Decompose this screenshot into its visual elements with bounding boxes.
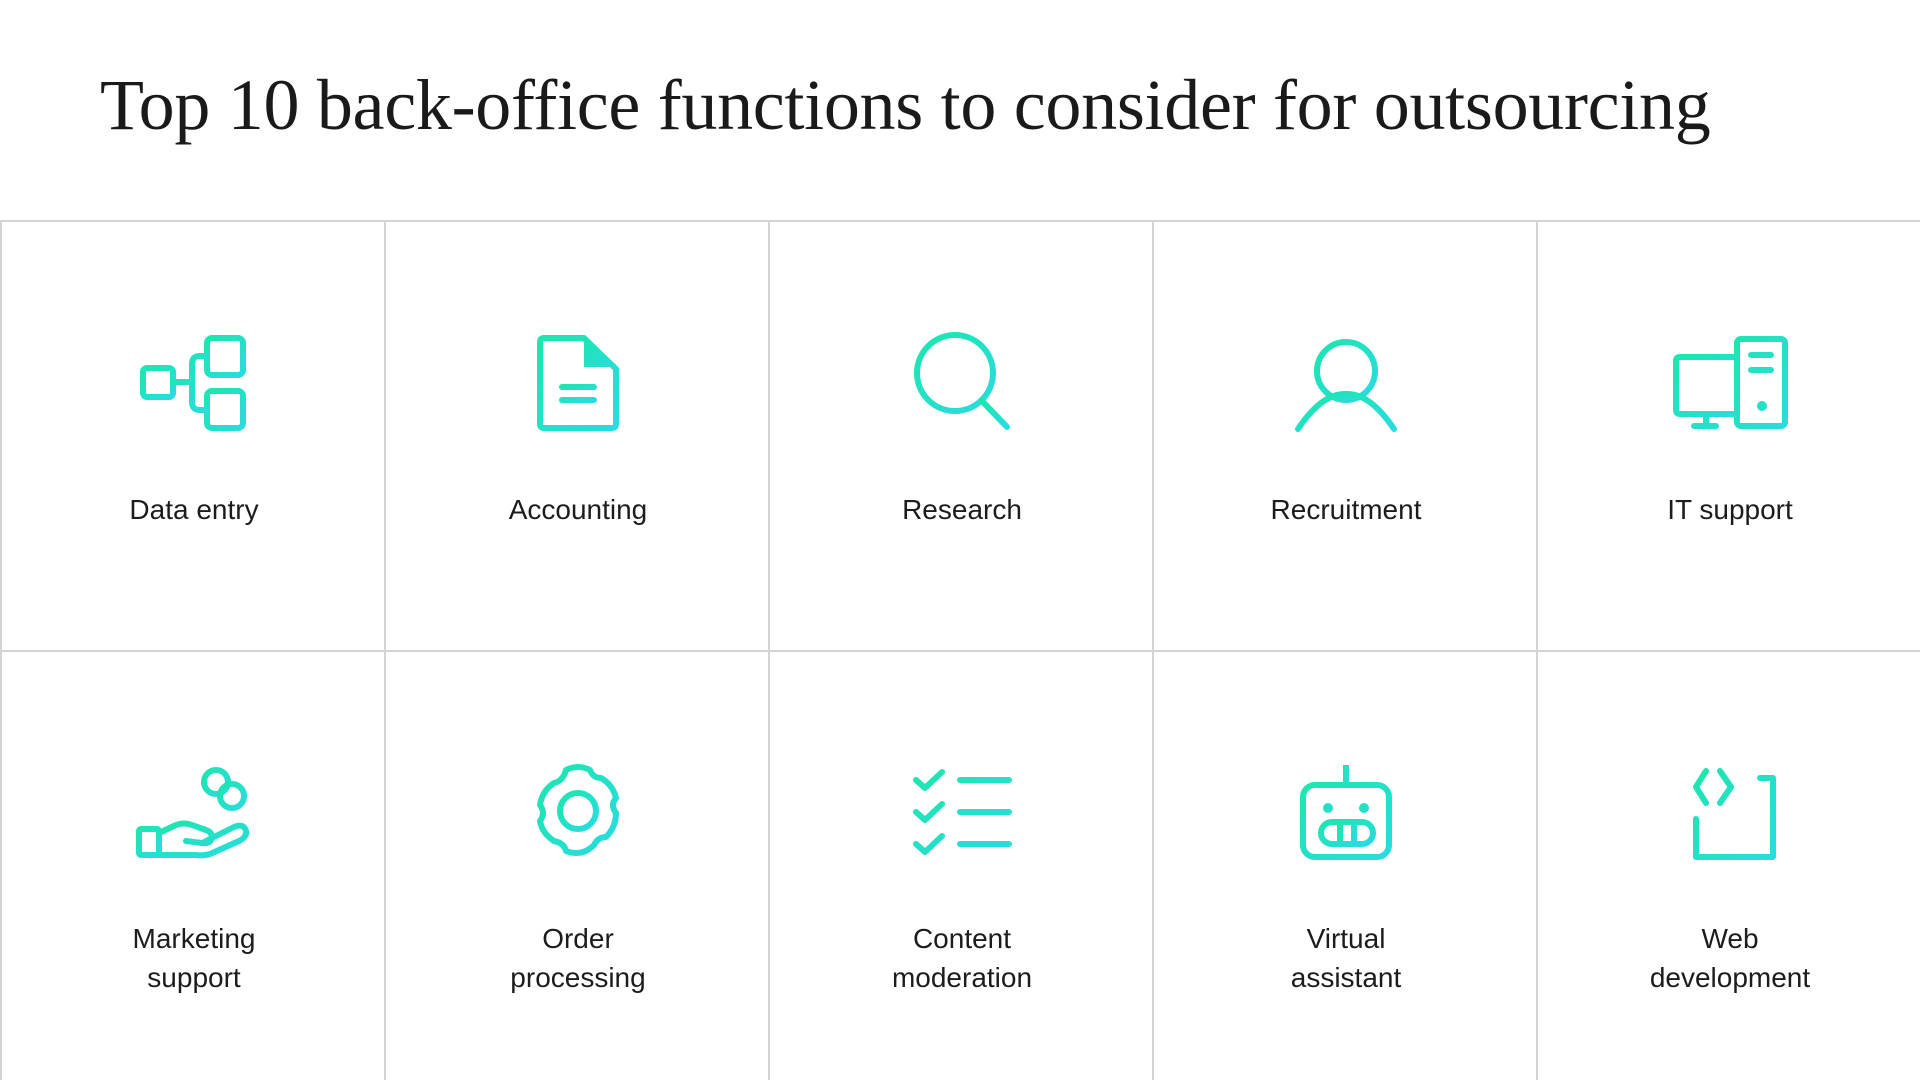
label — [892, 923, 1032, 993]
icon: magnifier — [914, 332, 1010, 430]
label: Accounting — [509, 494, 647, 525]
panel: order processing — [384, 650, 768, 1080]
icon: checklist — [913, 769, 1012, 855]
label — [510, 923, 646, 993]
label: Marketing — [133, 923, 255, 954]
label: Research — [902, 494, 1022, 525]
label: IT support — [1667, 494, 1793, 525]
label: support — [147, 962, 241, 993]
label: Order — [542, 923, 614, 954]
grid of functions — [0, 220, 1920, 1080]
label: Virtual — [1307, 923, 1385, 954]
title: Top 10 back-office functions to consider for outsourcing — [100, 65, 1710, 145]
icon: robot — [1300, 765, 1392, 860]
panel: marketing support — [0, 650, 384, 1080]
label — [133, 923, 255, 993]
panel: recruitment — [1152, 220, 1536, 650]
panel: web development — [1536, 650, 1920, 1080]
icon: document — [537, 335, 619, 431]
icon: code page — [1693, 768, 1776, 860]
label: development — [1650, 962, 1810, 993]
panel: research — [768, 220, 1152, 650]
icon: computer — [1673, 336, 1788, 429]
label — [1650, 923, 1810, 993]
panel: data entry — [0, 220, 384, 650]
label: Web — [1701, 923, 1759, 954]
label: Recruitment — [1271, 494, 1421, 525]
icon: person — [1295, 339, 1397, 432]
panel: content moderation — [768, 650, 1152, 1080]
icon: gear — [537, 764, 619, 856]
panel: accounting — [384, 220, 768, 650]
panel: virtual assistant — [1152, 650, 1536, 1080]
panel: IT support — [1536, 220, 1920, 650]
label: Content — [913, 923, 1011, 954]
label — [1291, 923, 1402, 993]
icon: hierarchy — [140, 335, 246, 431]
label: Data entry — [129, 494, 259, 525]
label: processing — [510, 962, 646, 993]
label: assistant — [1291, 962, 1401, 993]
label: moderation — [892, 962, 1032, 993]
icon: hand with coins — [136, 767, 250, 858]
